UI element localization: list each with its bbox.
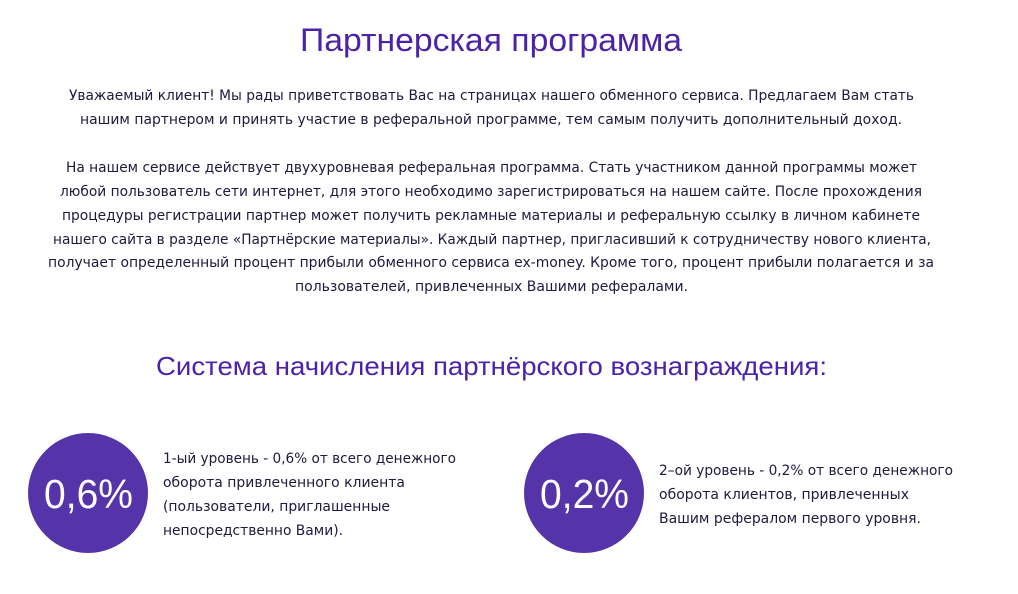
text block: level two description: оборота клиентов, привлеченных bbox=[659, 486, 909, 503]
text block: program description: пользователей, привлеченных Вашими рефералами. bbox=[295, 278, 688, 295]
text block: program description: любой пользователь сети интернет, для этого необходимо зарегистрироваться на нашем сайте. После прохождения bbox=[60, 183, 922, 200]
badge: 0,6% bbox=[28, 433, 148, 553]
text block: greeting bbox=[69, 87, 914, 128]
text block: program description bbox=[48, 159, 934, 295]
text block: level two description: 2–ой уровень - 0,2% от всего денежного bbox=[659, 462, 953, 479]
text block: level two description bbox=[659, 462, 953, 527]
text block: greeting: Уважаемый клиент! Мы рады приветствовать Вас на страницах нашего обменного сервиса. Предлагаем Вам стать bbox=[69, 87, 914, 104]
text block: level two description: Вашим рефералом первого уровня. bbox=[659, 510, 921, 527]
panel: level two bbox=[524, 433, 953, 553]
text block: level one description: 1-ый уровень - 0,6% от всего денежного bbox=[163, 450, 456, 467]
text block: level one description: (пользователи, приглашенные bbox=[163, 498, 390, 515]
text block: program description: процедуры регистрации партнер может получить рекламные материалы и реферальную ссылку в личном кабинете bbox=[62, 207, 920, 224]
text block: program description: На нашем сервисе действует двухуровневая реферальная программа. Стать участником данной программы может bbox=[66, 159, 917, 176]
badge: 0,6%: 0,6% bbox=[44, 471, 133, 517]
badge: 0,2%: 0,2% bbox=[540, 471, 629, 517]
text block: level one description: оборота привлеченного клиента bbox=[163, 474, 405, 491]
title: Партнерская программа bbox=[300, 22, 682, 58]
text block: greeting: нашим партнером и принять участие в реферальной программе, тем самым получить дополнительный доход. bbox=[80, 111, 902, 128]
badge: 0,2% bbox=[524, 433, 644, 553]
text block: program description: получает определенный процент прибыли обменного сервиса ex-money. Кроме того, процент прибыли полагается и за bbox=[48, 254, 934, 271]
text block: level one description bbox=[163, 450, 456, 539]
heading: reward system: Система начисления партнёрского вознаграждения: bbox=[156, 351, 827, 381]
text block: program description: нашего сайта в разделе «Партнёрские материалы». Каждый партнер, пригласивший к сотрудничеству нового клиента, bbox=[53, 231, 931, 248]
text block: level one description: непосредственно Вами). bbox=[163, 522, 343, 539]
panel: level one bbox=[28, 433, 456, 553]
